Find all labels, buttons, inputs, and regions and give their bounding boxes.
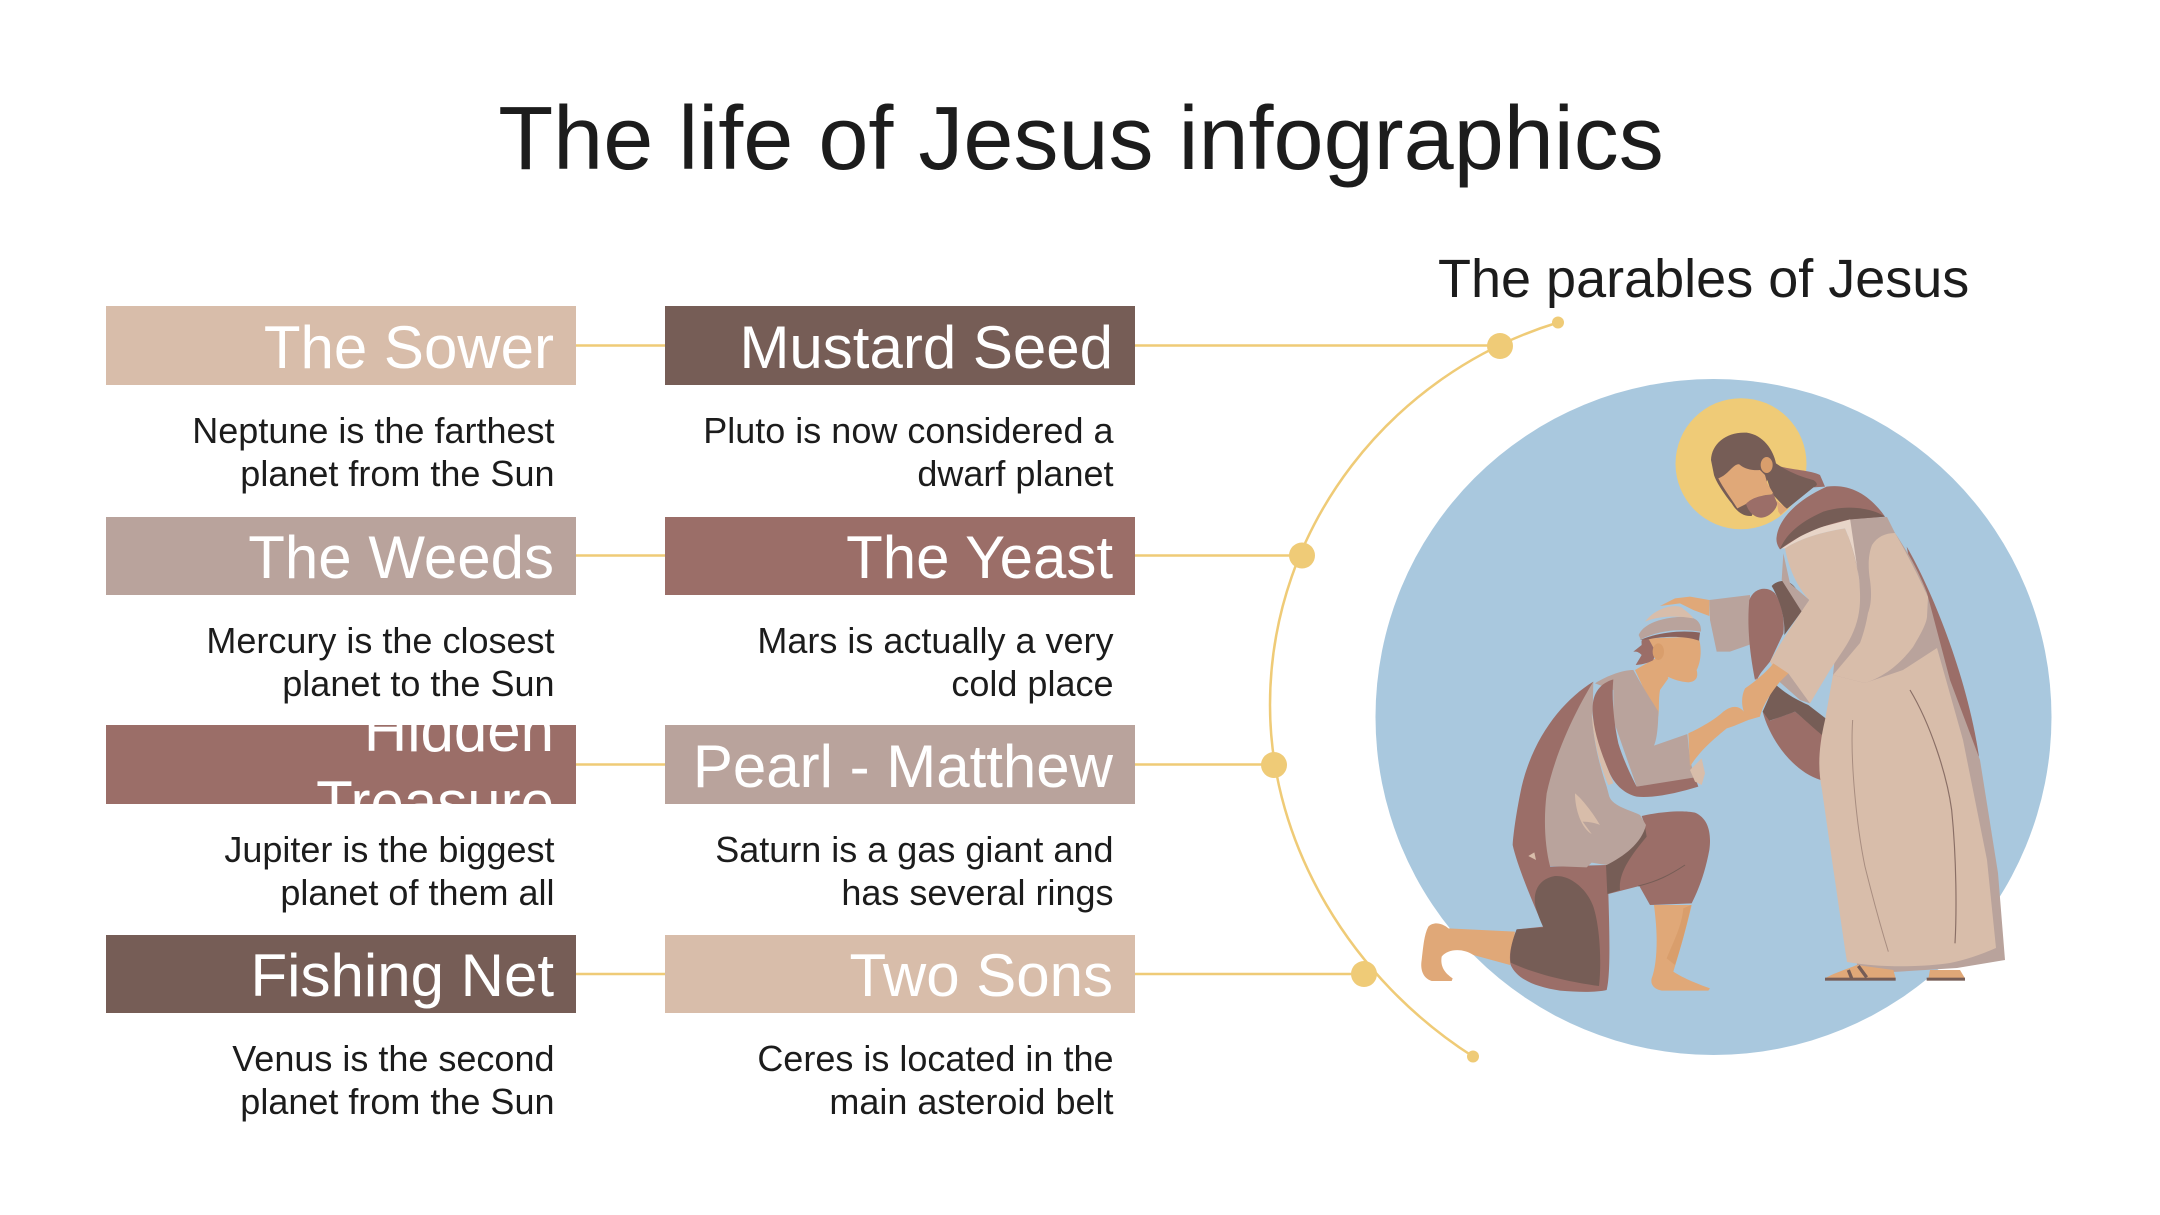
description xyxy=(757,1038,1114,1122)
bar label: The Yeast xyxy=(846,524,1113,591)
bar label: The Sower xyxy=(264,314,554,380)
description: planet from the Sun xyxy=(240,1081,554,1122)
card: Hidden Treasure xyxy=(106,725,576,913)
bar label xyxy=(106,306,576,384)
card: The Weeds xyxy=(106,517,576,704)
bar label: Two Sons xyxy=(850,942,1113,1009)
description: Saturn is a gas giant and xyxy=(715,828,1114,870)
bar label xyxy=(106,725,576,804)
subtitle: The parables of Jesus xyxy=(1438,249,1969,309)
description: Ceres is located in the xyxy=(757,1038,1114,1079)
figure: kneeling man xyxy=(1421,606,1748,992)
bar label xyxy=(665,306,1134,384)
card: The Yeast xyxy=(665,517,1135,704)
description: has several rings xyxy=(841,872,1114,913)
bar label: The Weeds xyxy=(248,524,554,591)
description xyxy=(232,1038,554,1122)
description: Jupiter is the biggest xyxy=(224,828,554,870)
description: Mercury is the closest xyxy=(206,620,554,661)
description xyxy=(192,410,554,494)
description: Mars is actually a very xyxy=(757,620,1114,661)
bar label xyxy=(106,516,576,595)
card: Two Sons xyxy=(665,935,1135,1122)
title: The life of Jesus infographics xyxy=(498,89,1664,189)
icon: blue circle background xyxy=(1376,379,2052,1055)
bar label: Pearl - Matthew xyxy=(693,732,1113,800)
description: Neptune is the farthest xyxy=(192,410,554,450)
bar label: Mustard Seed xyxy=(739,314,1113,380)
bar label xyxy=(665,516,1134,595)
description: planet of them all xyxy=(280,872,554,913)
description: main asteroid belt xyxy=(829,1081,1114,1122)
description xyxy=(715,828,1114,913)
card: Pearl - Matthew xyxy=(665,725,1135,913)
bar label: Fishing Net xyxy=(251,942,554,1009)
figure: Jesus xyxy=(1660,433,2005,981)
description: Venus is the second xyxy=(232,1038,554,1079)
description: planet to the Sun xyxy=(282,663,554,704)
description: cold place xyxy=(951,663,1114,704)
description: dwarf planet xyxy=(917,453,1114,494)
description: planet from the Sun xyxy=(240,453,554,494)
description xyxy=(224,828,554,913)
card: The Sower xyxy=(106,306,576,494)
description xyxy=(206,620,554,704)
bar label xyxy=(665,934,1134,1013)
description: Pluto is now considered a xyxy=(703,410,1114,450)
description xyxy=(757,620,1114,704)
description xyxy=(703,410,1114,494)
card: Fishing Net xyxy=(106,935,576,1122)
icon: halo xyxy=(1676,398,1806,529)
card: Mustard Seed xyxy=(665,306,1135,494)
bar label xyxy=(106,934,576,1013)
